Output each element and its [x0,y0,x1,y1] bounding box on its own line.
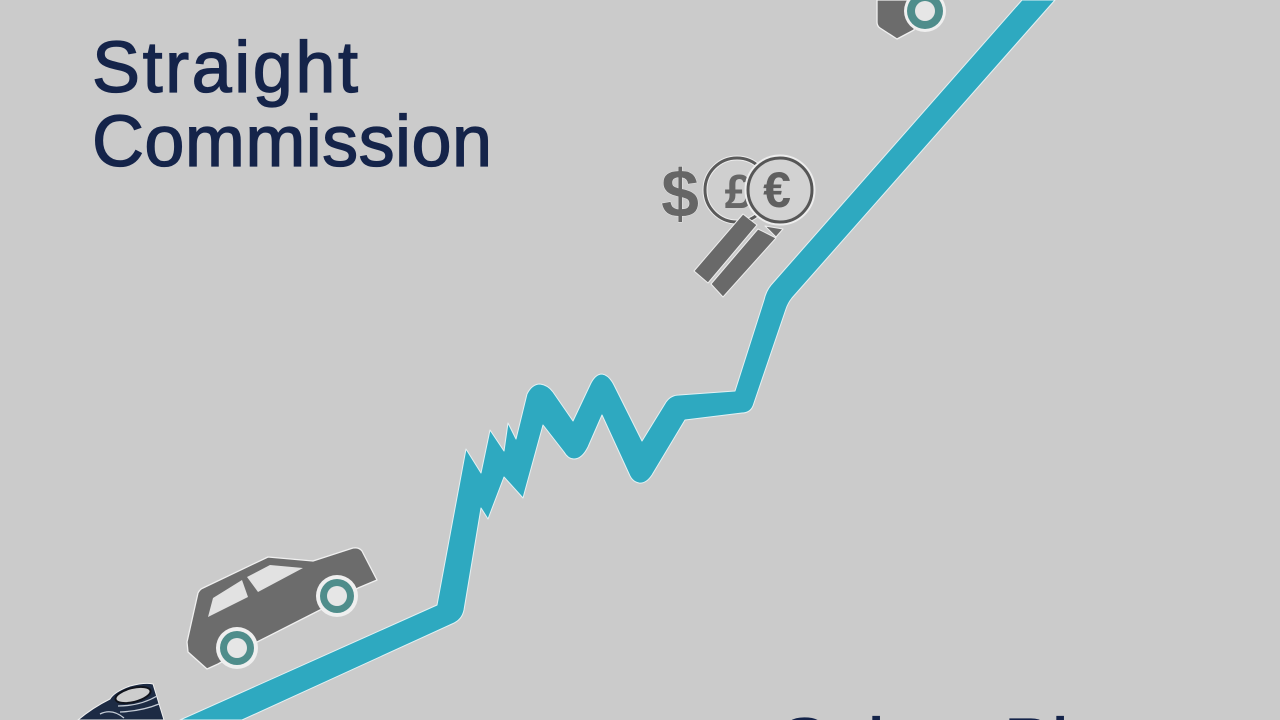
euro coin: € [763,162,791,218]
pound coin: £ [725,166,752,219]
icon: car on the line [187,548,377,669]
stack highlight lines [100,696,159,718]
car front wheel [316,575,358,617]
icon: currency symbols and bills [661,156,813,297]
car rear wheel [216,627,258,669]
euro coin [747,157,813,223]
title: Straight Commission: Straight [92,28,358,108]
icon: cropped car at top edge [877,0,946,39]
car rear window [208,580,248,617]
top car body [877,0,922,39]
icon: stack of coins, cropped at bottom edge [78,683,164,720]
top car wheel [904,0,946,32]
growth line [180,0,1055,720]
title: Straight Commission: Commission [92,102,492,182]
car body [187,548,377,669]
bills [694,214,783,297]
car front window [247,565,303,592]
stack body [78,683,164,720]
title: Straight Commission [92,28,492,182]
dollar sign: $ [661,156,699,232]
stack top [114,684,152,706]
pound coin [705,158,769,222]
